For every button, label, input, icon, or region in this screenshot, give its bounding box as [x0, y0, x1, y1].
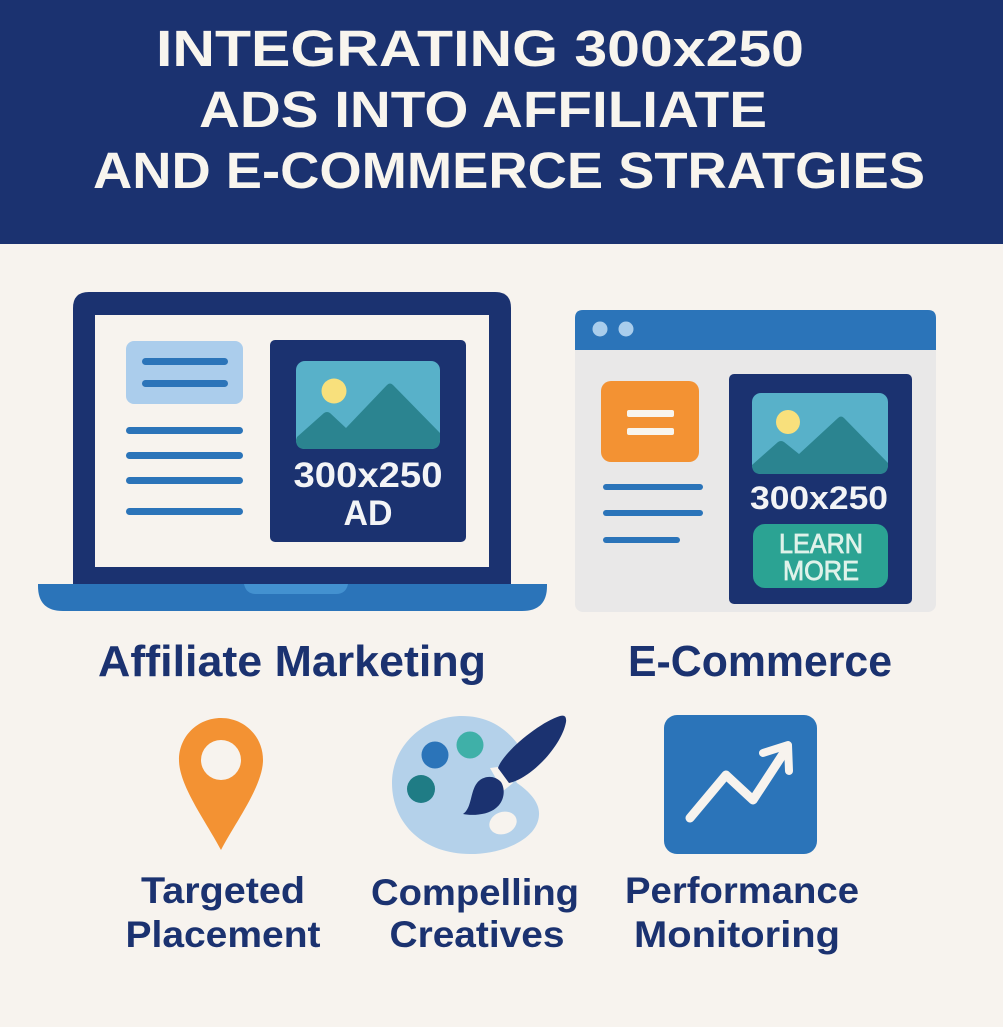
ad card: [729, 374, 912, 604]
icon: palette and brush: [392, 716, 566, 854]
title text: [93, 20, 925, 199]
ad size label: 300x250: [750, 480, 888, 516]
ad label: 300x250: [294, 456, 442, 495]
learn more button: LEARN: [779, 528, 863, 559]
title text: AND E-COMMERCE STRATGIES: [93, 142, 925, 199]
heading: affiliate marketing: Affiliate Marketing: [98, 637, 486, 686]
ad label: AD: [344, 494, 392, 533]
ad image: [296, 361, 440, 449]
label: targeted placement: [126, 870, 320, 955]
label: compelling creatives: [371, 872, 579, 955]
label: compelling creatives: Compelling: [371, 872, 579, 913]
icon: laptop with ad: [38, 292, 547, 611]
orange text tile: [601, 381, 699, 462]
icon: browser window with ad: [575, 310, 936, 612]
icon: location pin: [179, 718, 263, 850]
heading: e-commerce: E-Commerce: [628, 637, 892, 686]
title banner: [0, 0, 1003, 244]
text lines: [603, 484, 703, 543]
text block placeholder: [126, 341, 243, 404]
learn more button: [753, 524, 888, 588]
ad image: [752, 393, 888, 474]
ad card: [270, 340, 466, 542]
label: performance monitoring: Performance: [625, 870, 859, 911]
text lines: [126, 427, 243, 515]
label: performance monitoring: Monitoring: [634, 914, 840, 955]
label: compelling creatives: Creatives: [390, 914, 564, 955]
brush: [463, 716, 566, 815]
learn more button: MORE: [783, 555, 859, 586]
title text: INTEGRATING 300x250: [156, 20, 804, 77]
label: targeted placement: Placement: [126, 914, 320, 955]
ad label: [294, 456, 442, 533]
title text: ADS INTO AFFILIATE: [199, 81, 767, 138]
icon: performance chart: [664, 715, 817, 854]
label: performance monitoring: [625, 870, 859, 955]
label: targeted placement: Targeted: [141, 870, 305, 911]
